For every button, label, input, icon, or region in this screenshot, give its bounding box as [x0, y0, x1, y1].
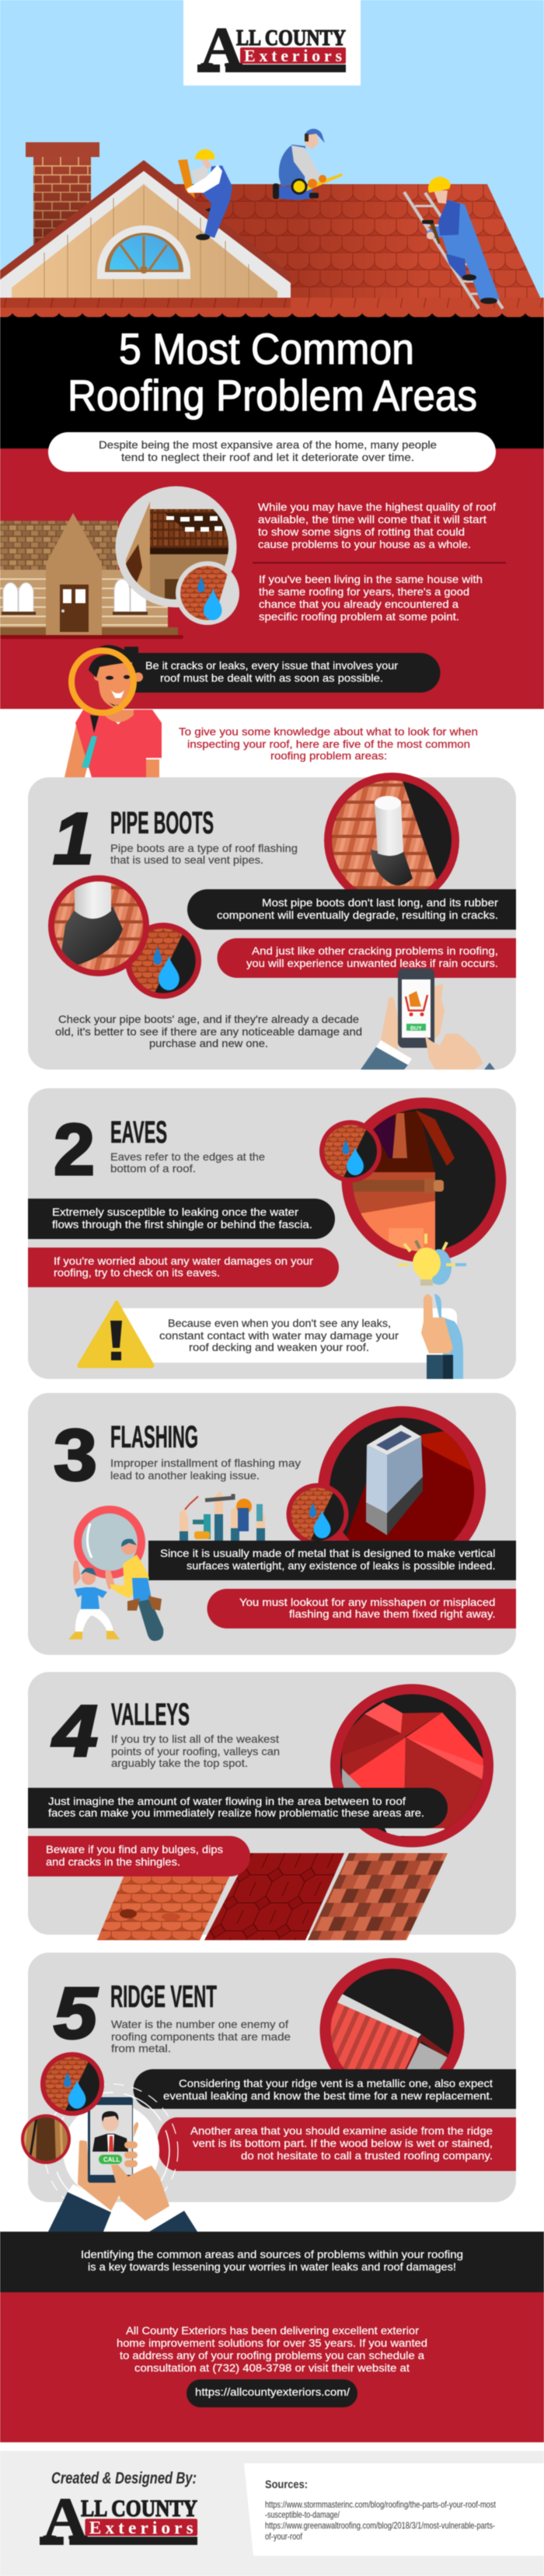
icon: raised hand — [421, 1294, 463, 1379]
red callout: flashing and have them fixed right away. — [289, 1607, 496, 1620]
icon: warning triangle — [77, 1300, 154, 1368]
intro text: Eaves refer to the edges at the — [110, 1150, 265, 1163]
heading: EAVES — [110, 1115, 167, 1150]
panel: ridge vent — [28, 1953, 516, 2202]
red callout — [157, 2117, 516, 2171]
closing black band — [0, 2232, 544, 2292]
red callout: You must lookout for any misshapen or misplaced — [239, 1596, 496, 1608]
red callout: And just like other cracking problems in roofing, — [252, 944, 498, 957]
logo panel — [183, 0, 361, 86]
red callout — [207, 1589, 516, 1628]
icon: light bulb — [398, 1234, 466, 1286]
text: same roofing: specific roofing problem at some point. — [259, 610, 459, 623]
subtitle pill — [48, 432, 496, 472]
illustration: hands holding tools — [180, 1491, 265, 1541]
illustration: valley close-up — [330, 1684, 493, 1850]
red callout: you will experience unwanted leaks if rain occurs. — [246, 957, 498, 969]
black callout: Since it is usually made of metal that is designed to make vertical — [160, 1547, 496, 1559]
red callout: Another area that you should examine aside from the ridge — [190, 2124, 493, 2137]
lead-in text: roofing problem areas: — [270, 749, 387, 762]
illustration: phone in hands: BUY — [410, 1026, 422, 1031]
footer — [0, 2451, 544, 2576]
intro text: arguably take the top spot. — [111, 1757, 248, 1769]
icon: leaking tiles — [319, 1120, 382, 1182]
footer logo — [40, 2487, 197, 2552]
intro text: bottom of a roof. — [110, 1162, 196, 1175]
closing black band: is a key towards lessening your worries in water leaks and roof damages! — [88, 2260, 456, 2273]
contact text: consultation at (732) 408-3798 or visit their website at — [134, 2361, 410, 2374]
contact text: All County Exteriors has been delivering excellent exterior — [126, 2324, 419, 2337]
lead-in text: inspecting your roof, here are five of the most common — [187, 738, 470, 750]
red callout — [28, 1836, 250, 1876]
sources panel: of-your-roof — [265, 2531, 303, 2542]
black callout: Extremely susceptible to leaking once the water — [52, 1206, 298, 1218]
panel: valleys — [28, 1672, 516, 1940]
heading: FLASHING — [110, 1420, 198, 1454]
illustration: eaves close-up — [342, 1098, 507, 1262]
main title: 5 Most Common — [119, 324, 414, 373]
red callout — [218, 938, 516, 978]
intro text: from metal. — [111, 2042, 171, 2054]
black callout — [148, 1541, 516, 1580]
black callout: faces can make you immediately realize how problematic these areas are. — [48, 1806, 424, 1819]
main title: Roofing Problem Areas — [68, 371, 477, 420]
closing text: purchase and new one. — [149, 1037, 268, 1049]
black callout — [28, 1199, 335, 1239]
intro text: Improper installment of flashing may — [110, 1457, 301, 1469]
website pill — [187, 2379, 357, 2407]
callout pill: Be it cracks or leaks, every issue that involves your — [145, 659, 398, 672]
worker with tape measure — [273, 129, 343, 200]
callout pill: roof must be dealt with as soon as possible. — [160, 672, 383, 684]
illustration: person with magnifier — [65, 645, 162, 777]
intro text — [111, 1733, 280, 1769]
closing text — [55, 1013, 362, 1049]
illustration: pipe boot close-up — [323, 772, 460, 890]
red callout — [28, 1248, 339, 1287]
illustration: damaged shingles — [97, 1853, 448, 1940]
black callout: Considering that your ridge vent is a metallic one, also expect — [179, 2077, 493, 2089]
intro text — [111, 2018, 291, 2054]
number 2: 2 — [54, 1108, 95, 1190]
black callout: eventual leaking and know the best time for a new replacement. — [163, 2089, 493, 2102]
number 4: 4 — [51, 1690, 98, 1771]
illustration: phone call with hands: CALL — [103, 2156, 120, 2163]
text: same roofing — [259, 573, 483, 623]
white note — [118, 1308, 457, 1363]
icon: leaking tiles — [286, 1483, 348, 1545]
red callout: Beware if you find any bulges, dips — [46, 1843, 223, 1855]
intro text — [110, 1457, 301, 1482]
intro text: Pipe boots are a type of roof flashing — [110, 842, 298, 854]
closing text: Check your pipe boots' age, and if they're already a decade — [58, 1013, 359, 1025]
black callout: surfaces watertight, any existence of leaks is possible indeed. — [187, 1559, 496, 1572]
intro text — [110, 842, 298, 866]
dormer gable — [0, 160, 291, 298]
logo panel: Exteriors — [244, 46, 342, 65]
footer logo: A — [43, 2487, 88, 2552]
contact text: home improvement solutions for over 35 years. If you wanted — [117, 2337, 427, 2349]
text: same roofing: chance that you already encountered a — [259, 598, 459, 610]
footer logo: Exteriors — [89, 2518, 194, 2538]
illustration: flashing close-up — [317, 1405, 486, 1541]
number 3: 3 — [54, 1414, 97, 1496]
black callout — [134, 2069, 516, 2109]
text: roof quality: cause problems to your house as a whole. — [258, 538, 471, 550]
black callout — [28, 1788, 448, 1828]
illustration: cracked boot close-up — [47, 875, 155, 976]
sources panel: Sources: — [265, 2478, 308, 2491]
worker on ladder — [404, 176, 503, 309]
chimney — [26, 142, 99, 254]
intro text: points of your roofing, valleys can — [111, 1745, 280, 1757]
sources panel — [244, 2463, 544, 2556]
lead-in text: To give you some knowledge about what to look for when — [179, 725, 478, 738]
panel: eaves — [28, 1088, 516, 1379]
white note: Because even when you don't see any leaks, — [168, 1317, 391, 1329]
text: roof quality: available, the time will come that it will start — [258, 513, 486, 525]
red callout: If you're worried about any water damages on your — [54, 1255, 313, 1267]
black callout: flows through the first shingle or behind the fascia. — [52, 1218, 312, 1230]
callout pill — [124, 653, 440, 693]
text: roof quality: to show some signs of rotting that could — [258, 525, 465, 538]
closing text: old, it's better to see if there are any noticeable damage and — [55, 1025, 362, 1038]
icon: wet wood circle — [21, 2114, 71, 2165]
panel: flashing — [28, 1393, 516, 1655]
heading: VALLEYS — [111, 1698, 190, 1732]
text: roof quality: While you may have the highest quality of roof — [258, 501, 496, 513]
title band — [0, 317, 544, 449]
black callout: Most pipe boots don't last long, and its rubber — [262, 896, 498, 909]
heading: PIPE BOOTS — [110, 806, 214, 840]
illustration: phone call with hands — [44, 2084, 197, 2232]
subtitle pill: tend to neglect their roof and let it deteriorate over time. — [121, 451, 414, 463]
lead-in text — [179, 725, 478, 762]
red callout: vent is its bottom part. If the wood below is wet or stained, — [193, 2137, 493, 2149]
red callout: do not hesitate to call a trusted roofing company. — [241, 2149, 493, 2162]
illustration: rotting house circle — [115, 487, 236, 614]
red callout: roofing, try to check on its eaves. — [54, 1266, 220, 1279]
illustration: ridge vent close-up — [319, 1957, 465, 2070]
credit heading: Created & Designed By: — [51, 2470, 197, 2487]
icon: leaking tiles — [176, 561, 239, 625]
intro text: lead to another leaking issue. — [110, 1469, 260, 1482]
text: same roofing: the same roofing for years, there's a good — [259, 585, 469, 598]
illustration: wooden house — [0, 513, 183, 639]
text: roof quality — [258, 501, 496, 550]
intro text: If you try to list all of the weakest — [111, 1733, 279, 1745]
logo panel: LL COUNTY — [236, 26, 346, 51]
closing black band: Identifying the common areas and sources of problems within your roofing — [81, 2248, 463, 2260]
black callout: Just imagine the amount of water flowing in the area between to roof — [48, 1795, 406, 1807]
contact red band — [0, 2292, 544, 2442]
illustration: people carrying magnifier — [68, 1506, 163, 1641]
contact text: to address any of your roofing problems you can schedule a — [120, 2349, 424, 2361]
subtitle pill: Despite being the most expansive area of the home, many people — [99, 438, 437, 451]
icon: leaking tiles — [40, 2052, 104, 2116]
black callout: component will eventually degrade, resulting in cracks. — [217, 909, 498, 921]
intro text: that is used to seal vent pipes. — [110, 853, 263, 866]
number 1: 1 — [53, 798, 94, 879]
white note: constant contact with water may damage your — [159, 1329, 399, 1342]
intro text: Water is the number one enemy of — [111, 2018, 288, 2030]
website pill: https://allcountyexteriors.com/ — [195, 2386, 350, 2398]
sources panel: -susceptible-to-damage/ — [265, 2509, 340, 2520]
icon: leaking tiles — [125, 923, 201, 999]
panel: pipe boots — [28, 770, 516, 1070]
contact text — [117, 2324, 427, 2374]
intro text: roofing components that are made — [111, 2030, 291, 2043]
red callout: and cracks in the shingles. — [46, 1855, 180, 1868]
header illustration — [0, 0, 544, 321]
intro red panel — [0, 449, 544, 709]
main title — [68, 324, 477, 420]
number 5: 5 — [54, 1972, 99, 2054]
sky — [0, 0, 544, 319]
worker with board — [178, 149, 232, 240]
illustration: phone in hands — [361, 969, 495, 1070]
tiled roof — [0, 184, 544, 321]
white note: roof decking and weaken your roof. — [189, 1341, 369, 1353]
footer logo: LL COUNTY — [81, 2495, 197, 2522]
logo panel: A — [201, 16, 242, 79]
text: same roofing: If you've been living in the same house with — [259, 573, 483, 585]
black callout — [187, 889, 516, 930]
intro text — [110, 1150, 265, 1175]
heading: RIDGE VENT — [110, 1980, 217, 2014]
